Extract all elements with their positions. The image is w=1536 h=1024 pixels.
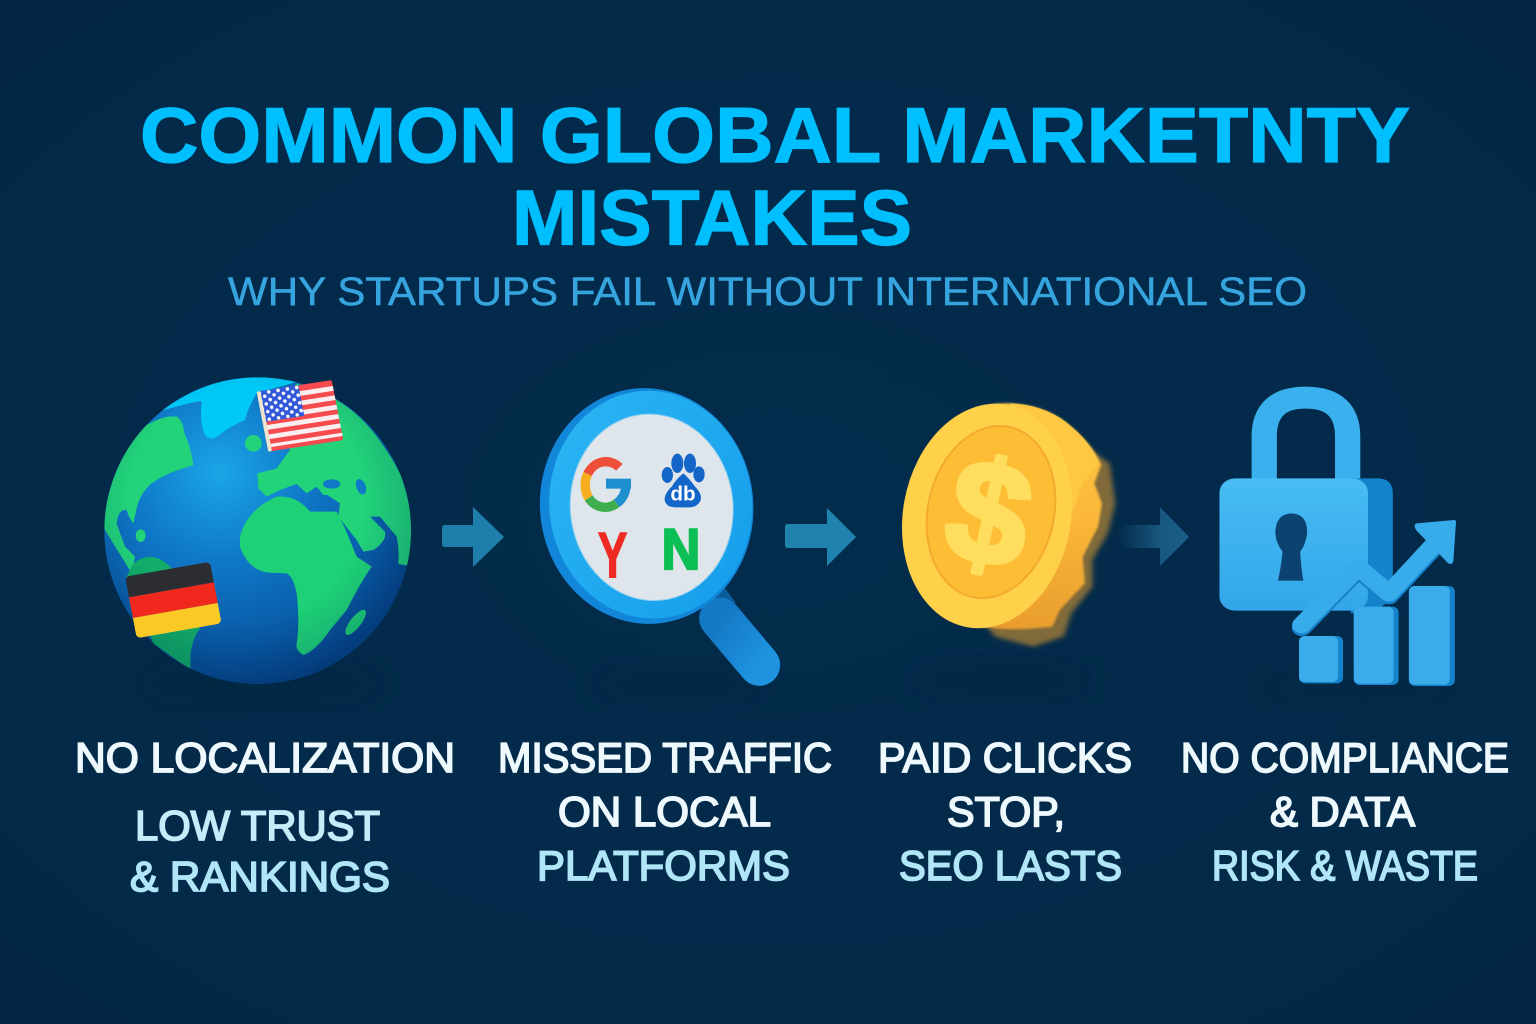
label: no compliance xyxy=(1181,734,1509,889)
label: no localization: & RANKINGS xyxy=(130,853,390,900)
icon: magnifying glass with search engines xyxy=(528,377,765,693)
logo: Baidu paw: db xyxy=(670,483,696,506)
label: missed traffic: ON LOCAL xyxy=(558,788,771,835)
label: no localization: LOW TRUST xyxy=(135,802,380,849)
label: missed traffic xyxy=(498,734,832,889)
flag: Germany xyxy=(125,562,222,638)
logo: Naver N: N xyxy=(662,518,700,582)
arrow 1 xyxy=(442,507,504,567)
label: no localization xyxy=(75,734,455,900)
icon: padlock with growth chart xyxy=(1219,398,1456,695)
label: paid clicks xyxy=(878,734,1132,889)
label: no compliance: RISK & WASTE xyxy=(1212,842,1478,889)
lock body xyxy=(1219,478,1368,611)
arrow 2 xyxy=(785,508,856,566)
label: no compliance: NO COMPLIANCE xyxy=(1181,734,1509,781)
subtitle: WHY STARTUPS FAIL WITHOUT INTERNATIONAL SEO xyxy=(228,270,1307,314)
flag: USA xyxy=(257,380,343,452)
logo: Google G xyxy=(585,462,631,507)
label: no localization: NO LOCALIZATION xyxy=(75,734,455,781)
label: paid clicks: PAID CLICKS xyxy=(878,734,1132,781)
arrow 3 xyxy=(1118,507,1189,566)
label: no compliance: & DATA xyxy=(1270,788,1415,835)
trend arrow xyxy=(1302,544,1437,627)
bars xyxy=(1299,586,1455,686)
lock side xyxy=(1351,478,1393,613)
icon: dissolving coin: $ xyxy=(933,426,1045,601)
shackle xyxy=(1264,398,1348,483)
icon: dissolving coin xyxy=(885,390,1115,689)
title line 2: MISTAKES xyxy=(512,174,912,262)
title xyxy=(140,91,1410,262)
label: paid clicks: SEO LASTS xyxy=(899,842,1122,889)
keyhole xyxy=(1275,513,1307,581)
label: missed traffic: MISSED TRAFFIC xyxy=(498,734,832,781)
label: missed traffic: PLATFORMS xyxy=(537,842,790,889)
icon: globe with flags xyxy=(97,370,417,695)
title line 1: COMMON GLOBAL MARKETNTY xyxy=(140,91,1410,179)
logo: Baidu paw xyxy=(662,454,705,507)
label: paid clicks: STOP, xyxy=(947,788,1065,835)
logo: Yandex Y: Y xyxy=(598,518,628,591)
